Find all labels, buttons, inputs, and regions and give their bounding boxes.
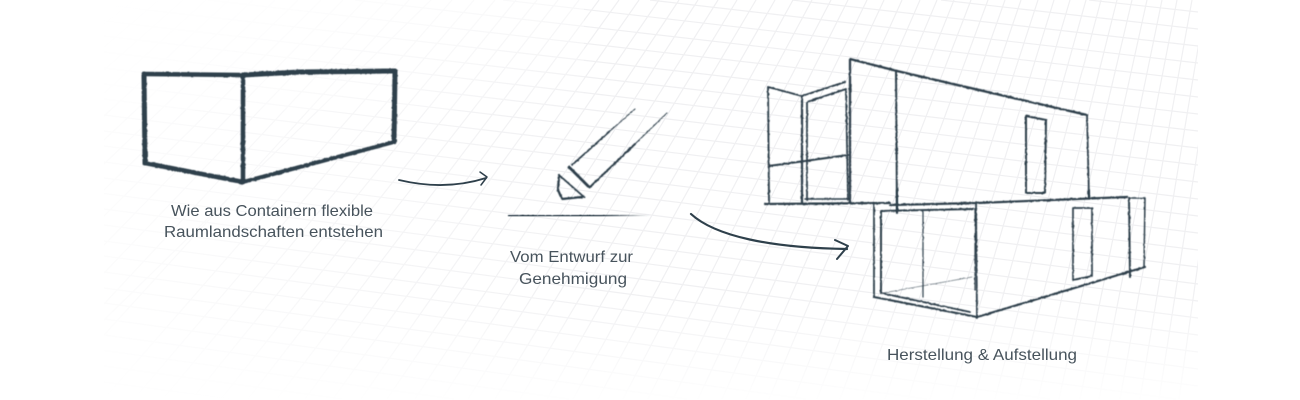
caption: step one: Raumlandschaften entstehen xyxy=(164,224,383,241)
arrow: step two to step three xyxy=(691,214,848,259)
drawn line under pencil xyxy=(508,215,650,216)
sketch: lower container xyxy=(874,190,1145,318)
caption: step two: Genehmigung xyxy=(519,271,627,288)
icon: drawing pencil xyxy=(558,109,667,199)
background: perspective grid xyxy=(314,0,1198,344)
sketch: single container xyxy=(144,71,395,182)
caption: step one xyxy=(164,203,383,241)
sketch: upper container xyxy=(765,59,1089,213)
caption: step two xyxy=(510,249,634,288)
caption: step one: Wie aus Containern flexible xyxy=(171,203,373,220)
arrow: step one to step two xyxy=(399,172,487,185)
caption: step three: Herstellung & Aufstellung xyxy=(887,347,1077,364)
caption: step two: Vom Entwurf zur xyxy=(510,249,634,266)
